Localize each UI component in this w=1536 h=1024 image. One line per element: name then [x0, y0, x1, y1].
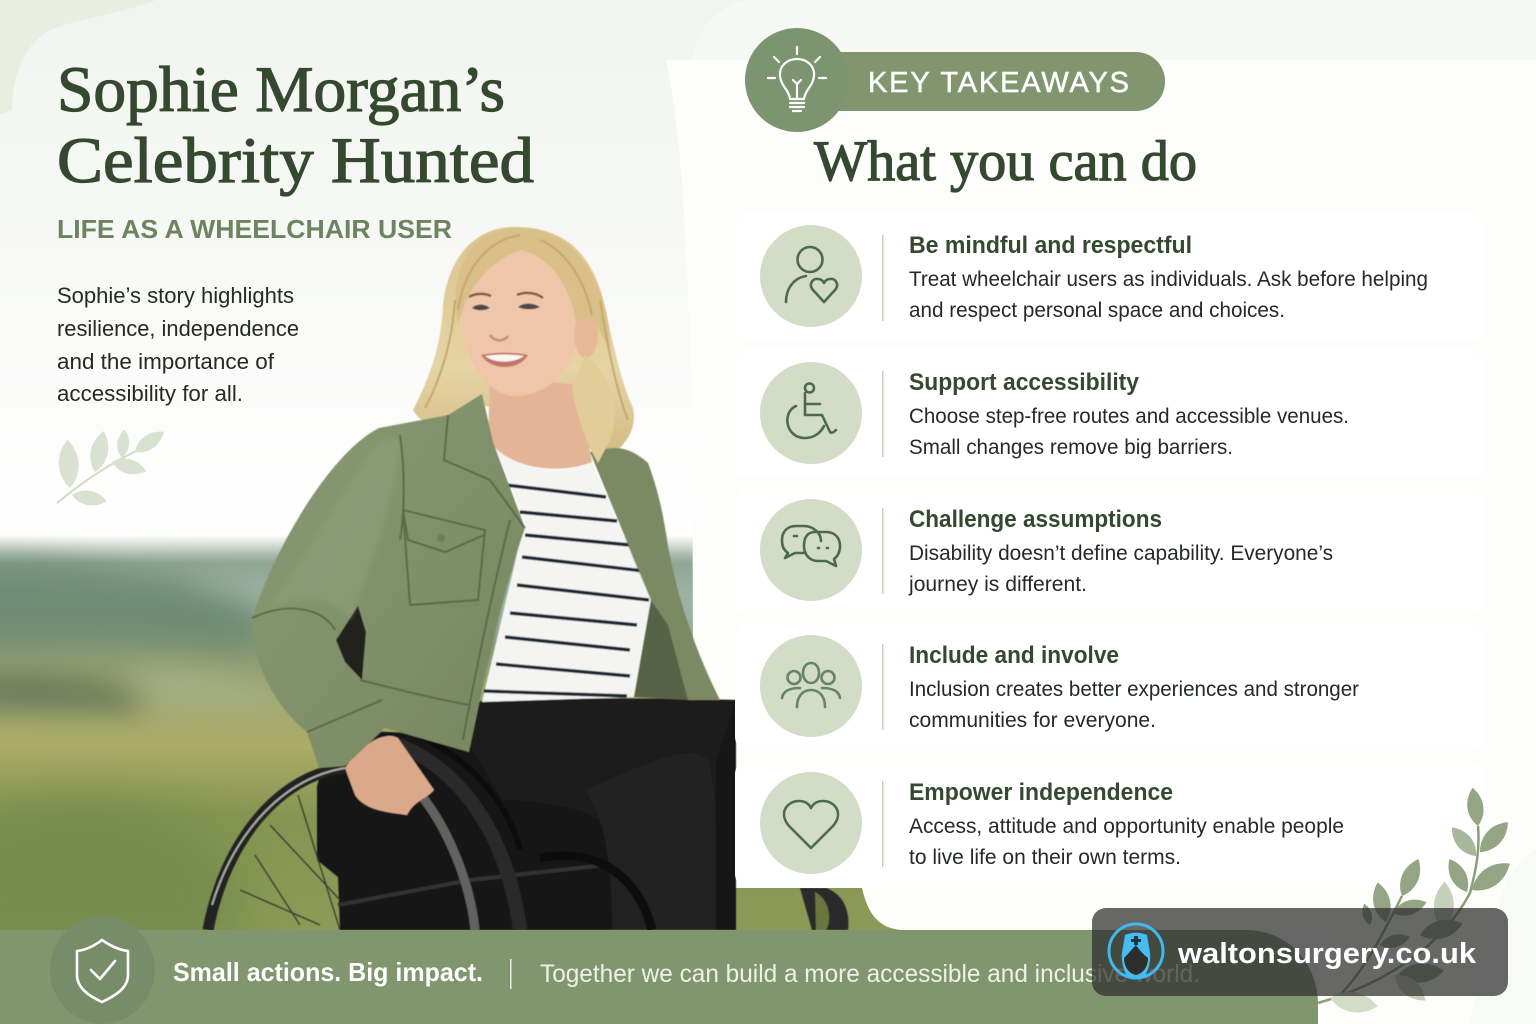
- icon: shield with check: [77, 940, 128, 1002]
- card title: Include and involve: [909, 642, 1119, 669]
- card text: Disability doesn’t define capability. Everyone’s: [909, 542, 1333, 565]
- hair front: [456, 248, 610, 347]
- watermark box: [1092, 908, 1508, 996]
- card text: and respect personal space and choices.: [909, 299, 1285, 322]
- pill: [800, 52, 1165, 111]
- shirt stripes: [484, 485, 649, 696]
- icon: lightbulb: [768, 47, 826, 111]
- eyes: [472, 304, 540, 310]
- divider: [882, 371, 884, 457]
- shirt: [482, 442, 651, 702]
- key takeaways badge: [745, 28, 1165, 132]
- landscape photo background: [0, 510, 900, 930]
- band shape: [0, 930, 1318, 1024]
- card text: to live life on their own terms.: [909, 846, 1181, 869]
- eyebrows: [469, 293, 543, 298]
- card title: Challenge assumptions: [909, 506, 1162, 533]
- decorative blob top-left: [0, 0, 156, 115]
- band headline: Small actions. Big impact.: [173, 957, 483, 987]
- divider: [882, 508, 884, 594]
- section heading: What you can do: [814, 130, 1197, 193]
- trousers: [472, 698, 735, 821]
- right hair lock: [572, 355, 614, 463]
- band text: Together we can build a more accessible and inclusive world.: [540, 960, 1200, 988]
- divider: [882, 781, 884, 867]
- jacket left side and sleeve: [252, 394, 525, 768]
- card text: [908, 542, 1333, 596]
- leaf sprig bottom-right: [1318, 787, 1515, 1016]
- card 5: [735, 760, 1483, 888]
- card background: [735, 760, 1483, 888]
- card text: Small changes remove big barriers.: [909, 436, 1233, 459]
- jacket inner shadow: [634, 600, 688, 700]
- card text: [909, 268, 1428, 322]
- icon: person with heart: [760, 225, 862, 327]
- icon: leaf sprig left: [57, 426, 168, 508]
- wheel rim: [208, 768, 345, 930]
- watermark text: waltonsurgery.co.uk: [1177, 938, 1477, 970]
- subtitle: LIFE AS A WHEELCHAIR USER: [57, 214, 452, 244]
- photo: woman in wheelchair: [208, 227, 848, 930]
- sleeve shading: [332, 488, 388, 620]
- caster wheel behind panel: [800, 888, 848, 930]
- intro text: [57, 283, 299, 406]
- watermark: waltonsurgery.co.uk: [1092, 908, 1508, 996]
- divider: [882, 644, 884, 730]
- intro text: accessibility for all.: [57, 381, 243, 406]
- icon: nurse logo: [1109, 924, 1163, 978]
- mouth: [481, 353, 528, 367]
- badge circle: [745, 28, 849, 132]
- card text: [909, 405, 1349, 459]
- card 3: [735, 487, 1483, 615]
- tyre and mudguard: [418, 738, 522, 850]
- takeaways white panel: [666, 60, 1536, 1024]
- band divider: [510, 959, 512, 989]
- intro text: Sophie’s story highlights: [57, 283, 294, 308]
- intro text: resilience, independence: [57, 316, 299, 341]
- hair behind: [413, 227, 634, 463]
- nose: [490, 335, 508, 340]
- face: [462, 250, 578, 396]
- card text: communities for everyone.: [909, 709, 1156, 732]
- title: Celebrity Hunted: [57, 125, 534, 197]
- title: [57, 54, 534, 197]
- card text: Choose step-free routes and accessible venues.: [909, 405, 1349, 428]
- decorative blob top-right: [692, 0, 1536, 60]
- footer band: [0, 916, 1318, 1024]
- card title: Empower independence: [909, 779, 1173, 806]
- icon: speech bubbles: [760, 499, 862, 601]
- card text: [909, 815, 1344, 869]
- card text: Inclusion creates better experiences and stronger: [909, 678, 1359, 701]
- neck: [488, 375, 592, 469]
- card background: [735, 213, 1483, 341]
- card background: [735, 623, 1483, 751]
- intro text: and the importance of: [57, 349, 275, 374]
- wheelchair frame: [316, 731, 613, 930]
- caster fork: [540, 856, 652, 930]
- card text: journey is different.: [908, 573, 1087, 596]
- jacket right side: [590, 448, 720, 700]
- icon: heart: [760, 772, 862, 874]
- card 2: [735, 350, 1483, 478]
- card text: [909, 678, 1359, 732]
- title: Sophie Morgan’s: [57, 54, 505, 126]
- divider: [882, 235, 884, 321]
- card title: Support accessibility: [909, 369, 1140, 396]
- card 4: [735, 623, 1483, 751]
- card 1: [735, 213, 1483, 341]
- ear: [574, 312, 598, 358]
- icon: wheelchair: [760, 362, 862, 464]
- hand: [345, 736, 434, 815]
- jacket details: [252, 415, 525, 740]
- hair strands: [425, 235, 628, 420]
- card text: Treat wheelchair users as individuals. Ask before helping: [909, 268, 1428, 291]
- badge label: KEY TAKEAWAYS: [868, 67, 1129, 99]
- card background: [735, 350, 1483, 478]
- spokes: [240, 795, 340, 930]
- backrest seen through arm gap: [336, 606, 366, 680]
- card title: Be mindful and respectful: [909, 232, 1192, 259]
- card text: Access, attitude and opportunity enable people: [909, 815, 1344, 838]
- card background: [735, 487, 1483, 615]
- icon: group of people: [760, 635, 862, 737]
- shield circle: [50, 916, 155, 1024]
